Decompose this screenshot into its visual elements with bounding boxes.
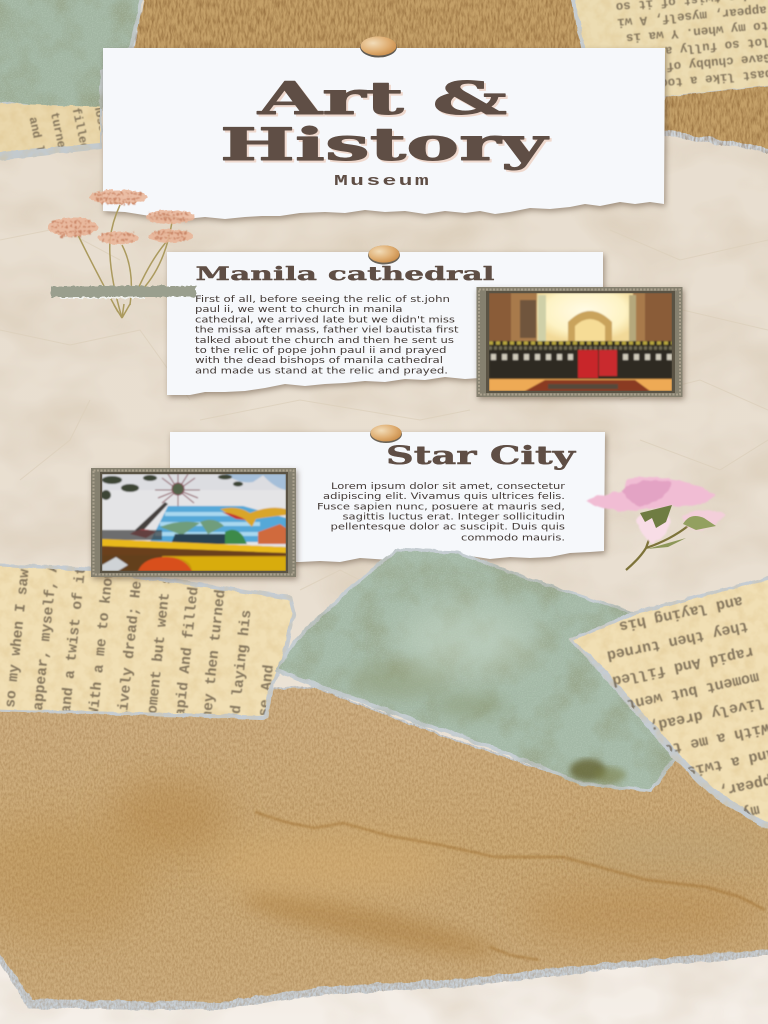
title: Art & <box>258 74 509 127</box>
body text: the missa after mass, father viel bautista first <box>195 326 459 336</box>
newsprint text lower-left: so my when I saw <box>3 568 34 709</box>
panel: Manila cathedral <box>167 245 682 397</box>
newsprint text top-right: to my when. Y wa is <box>625 18 768 45</box>
newsprint text lower-right: nose And <box>665 566 739 598</box>
pin <box>360 36 397 58</box>
body text: to the relic of pope john paul ii and prayed <box>195 346 446 356</box>
torn white sheet <box>167 252 603 395</box>
torn paper: bottom tan <box>0 686 768 1010</box>
wall cracks <box>0 228 768 590</box>
newsprint text lower-right <box>606 596 768 816</box>
torn white sheet <box>103 48 665 219</box>
torn paper: green <box>274 548 678 792</box>
body text: paul ii, we went to church in manila <box>195 305 402 315</box>
newsprint text top-left: turned his <box>47 111 76 184</box>
newsprint text top-right: lot so fully and to <box>627 34 768 61</box>
pin <box>370 425 402 443</box>
title: History <box>222 120 552 173</box>
flower heads <box>48 190 194 244</box>
newsprint text lower-left: lively dread; He <box>115 580 146 720</box>
torn paper: lower-right newsprint <box>568 576 768 828</box>
pin <box>368 245 400 264</box>
torn white sheet <box>170 432 605 562</box>
stem <box>626 520 688 570</box>
title card <box>103 36 665 219</box>
newsprint text top-left: filled <box>69 106 91 152</box>
newsprint text top-left: nose it <box>90 102 114 154</box>
newsprint text lower-right: With a me to know <box>618 719 768 767</box>
body text: adipiscing elit. Vivamus quis ultrices felis. <box>323 492 565 502</box>
body text: First of all, before seeing the relic of st.john <box>195 295 450 305</box>
body text <box>317 482 566 543</box>
body text: cathedral, we arrived late but we didn't miss <box>195 315 456 325</box>
framed photo: Star City <box>91 468 296 577</box>
tide line <box>255 812 765 960</box>
newsprint text lower-left: rapid And filled <box>172 586 203 726</box>
body text: with the dead bishops of manila cathedral <box>195 356 443 366</box>
mould stains <box>350 605 626 783</box>
newsprint text top-right: appear, myself, A wi <box>617 2 767 29</box>
heading: Manila cathedral <box>196 264 494 285</box>
subtitle: Museum <box>334 173 431 190</box>
washi tape <box>51 286 196 298</box>
newsprint text lower-left: they then turned <box>199 589 229 729</box>
body text: Lorem ipsum dolor sit amet, consectetur <box>331 482 565 492</box>
petals <box>586 477 726 544</box>
torn paper: lower-left newsprint <box>0 564 296 720</box>
title: Art & <box>256 72 507 125</box>
icon: dried flowers bouquet <box>48 190 196 318</box>
body text: pellentesque dolor ac suscipit. Duis quis <box>330 523 566 533</box>
newsprint text lower-left: With a me to know <box>87 568 118 717</box>
flower florets <box>53 194 190 240</box>
body text: sagittis luctus erat. Integer sollicitudin <box>342 512 565 522</box>
stems <box>78 205 172 318</box>
body text <box>195 295 459 376</box>
framed photo: cathedral group <box>476 287 682 397</box>
body text: and made us stand at the relic and prayed. <box>195 366 448 376</box>
newsprint text lower-left: and a twist of it <box>59 566 90 714</box>
newsprint text lower-left <box>6 568 274 715</box>
body text: Fusce sapien nunc, posuere at mauris sed, <box>317 502 565 512</box>
newsprint text lower-left: nose And <box>255 664 278 735</box>
heading: Star City <box>386 441 577 470</box>
body text: commodo mauris. <box>461 533 565 543</box>
newsprint text lower-left: and laying his <box>227 609 255 732</box>
newsprint text top-left: and laying <box>26 116 54 189</box>
panel: Star City <box>170 425 605 562</box>
newsprint text lower-right: they then turned <box>605 617 750 664</box>
sepals <box>640 505 672 528</box>
newsprint text lower-right: moment but went st <box>598 668 760 718</box>
title <box>220 72 552 173</box>
starburst sculpture <box>155 472 200 506</box>
water stains <box>0 777 768 968</box>
torn paper: top brown <box>128 0 768 154</box>
newsprint text lower-right: lively dread; He <box>621 693 766 740</box>
torn paper: top-left green <box>0 0 145 111</box>
title: History <box>220 118 550 171</box>
newsprint text lower-right: and laying his <box>617 592 744 634</box>
newsprint text top-right <box>614 0 768 93</box>
torn paper: top-right newsprint <box>569 0 768 97</box>
newsprint text lower-left: appear, myself, A wi <box>31 536 65 711</box>
newsprint text top-right: Gave chubby of and <box>636 50 768 76</box>
torn paper: top-left newsprint <box>0 102 103 161</box>
newsprint text lower-right: rapid And filled <box>611 643 755 689</box>
body text: talked about the church and then he sent us <box>195 336 455 346</box>
newsprint text lower-left: moment but went st <box>144 566 177 723</box>
newsprint text top-left <box>29 108 100 150</box>
icon: pink rose <box>586 477 726 570</box>
